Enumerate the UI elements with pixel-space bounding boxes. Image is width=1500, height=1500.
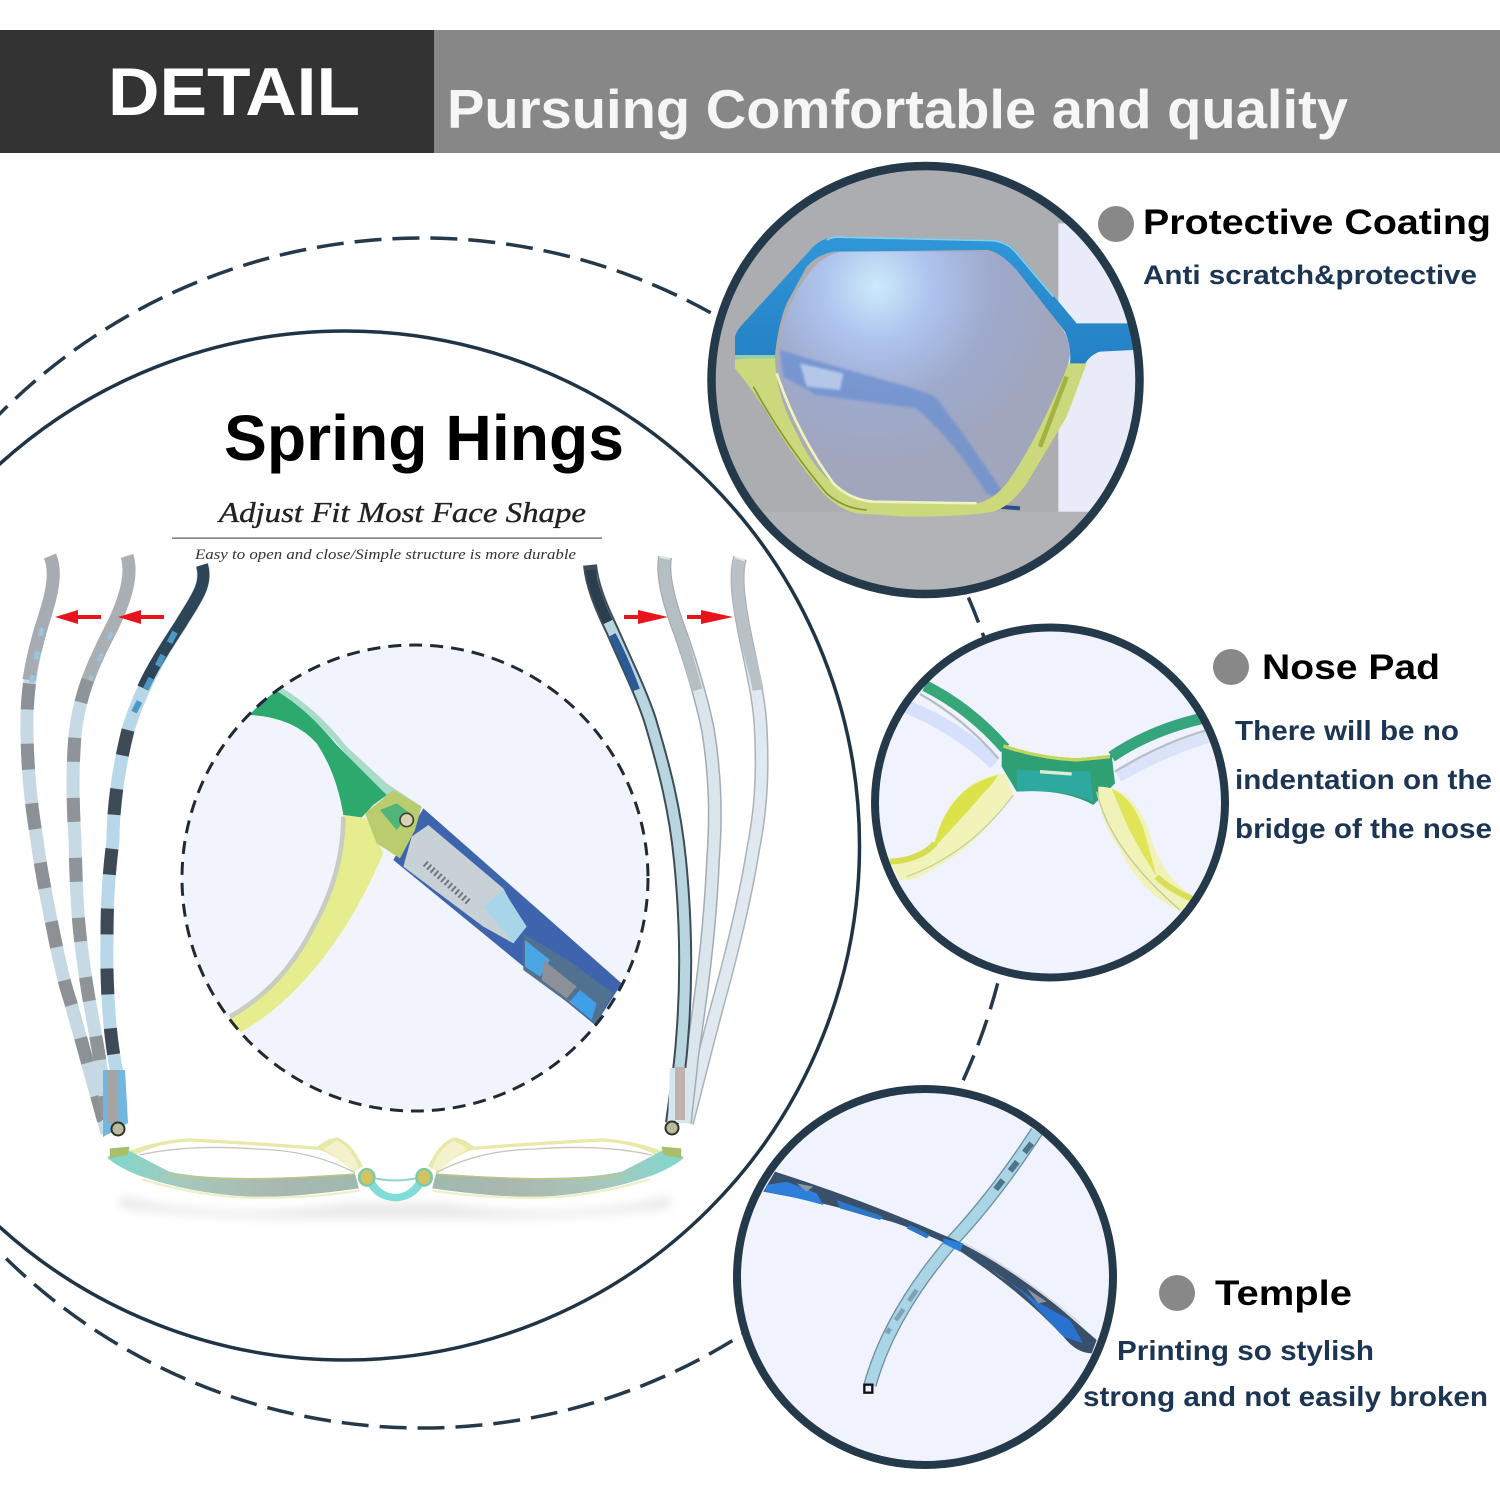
left hinge block: [103, 1070, 128, 1137]
frame shadow: [120, 1196, 670, 1219]
thin rule: [172, 538, 602, 539]
bullet dot: [1098, 206, 1134, 242]
dashed ring: [182, 645, 648, 1111]
label description: There will be no: [1235, 715, 1459, 746]
front frame of glasses: [108, 1137, 683, 1219]
temple: middle right: [664, 557, 715, 1123]
panel: protective coating circle: [707, 166, 1147, 605]
heading: tagline: Pursuing Comfortable and quality: [447, 78, 1348, 140]
label description: Anti scratch&protective: [1143, 260, 1477, 290]
spring hinge image: [230, 687, 622, 1033]
label heading: Protective Coating: [1143, 203, 1491, 242]
ring: [875, 628, 1225, 978]
arrow 3: [624, 610, 668, 624]
arrow 1: [55, 610, 101, 624]
ring: [712, 166, 1140, 594]
subheading: Adjust Fit Most Face Shape: Adjust Fit Most Face Shape: [217, 498, 586, 529]
left temples fan: [27, 556, 203, 1137]
temple photo: [763, 1132, 1097, 1393]
temple: outer left: [27, 556, 107, 1133]
temple: outer right: [687, 558, 762, 1123]
right hinge block: [668, 1067, 690, 1123]
label description: [1083, 1335, 1488, 1412]
caption: easy to open: Easy to open and close/Simple structure is more durable: [194, 547, 576, 563]
right hinge screw: [666, 1122, 678, 1134]
label: protective coating: [1098, 203, 1491, 290]
temple: dark left: [107, 565, 203, 1073]
solid large ring: [0, 331, 860, 1360]
label description: Printing so stylish: [1117, 1335, 1374, 1366]
right temples fan: [590, 557, 762, 1134]
red arrows: [55, 610, 733, 624]
label description: [1235, 715, 1492, 844]
temple: middle left: [73, 556, 129, 1133]
frame right half: [428, 1137, 683, 1198]
nose pad photo: [890, 686, 1220, 913]
label heading: Temple: [1215, 1274, 1352, 1313]
label heading: Nose Pad: [1262, 648, 1440, 687]
nose bridge: [359, 1169, 432, 1198]
label: temple: [1083, 1274, 1488, 1412]
dashed outer ring connector: [0, 238, 1017, 1428]
label description: strong and not easily broken: [1083, 1381, 1488, 1412]
left hinge screw: [112, 1122, 124, 1136]
temple: dark right: [590, 565, 685, 1123]
ring: [737, 1089, 1113, 1465]
header bar: [0, 30, 1500, 153]
arrow 2: [118, 610, 164, 624]
label description: bridge of the nose: [1235, 813, 1492, 844]
panel: spring hinge close-up: [182, 645, 648, 1111]
heading: Spring Hings: Spring Hings: [224, 402, 624, 474]
bullet dot: [1213, 649, 1249, 685]
label: nose pad: [1213, 648, 1492, 844]
panel: nose pad circle: [875, 628, 1225, 978]
heading: DETAIL: DETAIL: [108, 54, 360, 130]
label description: indentation on the: [1235, 764, 1492, 795]
coating photo: [735, 223, 1136, 517]
bullet dot: [1159, 1275, 1195, 1311]
arrow 4: [687, 610, 733, 624]
panel: temple circle: [737, 1089, 1113, 1465]
